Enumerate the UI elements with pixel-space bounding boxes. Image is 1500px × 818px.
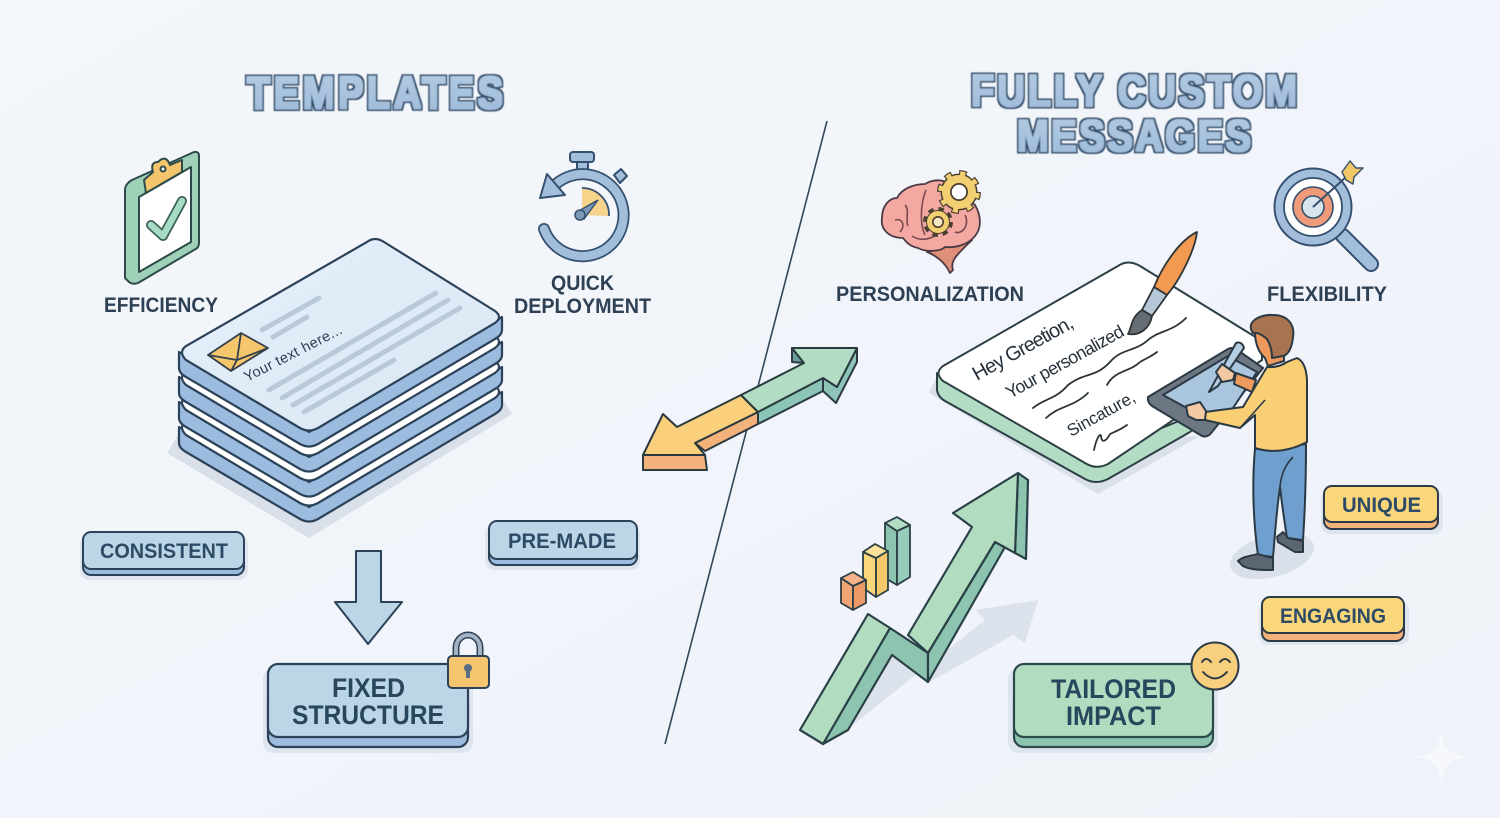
letter handwriting: Hey Greetion,	[969, 312, 1077, 385]
icon: stopwatch	[540, 152, 627, 256]
hair	[1251, 315, 1293, 358]
icon: paintbrush	[1128, 232, 1197, 334]
label: quick deployment: DEPLOYMENT	[514, 295, 651, 318]
pill: unique	[1321, 486, 1443, 534]
card placeholder lines	[262, 293, 460, 412]
icon: smiley	[1192, 642, 1238, 690]
bar: teal	[885, 517, 910, 585]
icon: target magnifier	[1274, 161, 1371, 264]
box: fixed structure	[263, 664, 473, 753]
neck and face	[1255, 332, 1284, 366]
letter handwriting	[969, 312, 1139, 440]
title: templates: TEMPLATES	[247, 67, 503, 118]
letter wavy lines	[1033, 318, 1186, 450]
label: quick deployment: QUICK	[551, 272, 614, 295]
tablet	[1148, 348, 1263, 436]
person legs	[1253, 444, 1306, 557]
card placeholder text: Your text here...	[242, 322, 345, 386]
label: quick deployment	[514, 272, 651, 318]
person shoes	[1238, 532, 1303, 570]
letter handwriting: Your personalized	[1002, 321, 1127, 402]
label: flexibility: FLEXIBILITY	[1267, 283, 1387, 306]
pill: consistent: CONSISTENT	[100, 540, 228, 563]
box: fixed structure: STRUCTURE	[292, 700, 444, 730]
personalized letter	[937, 262, 1262, 482]
letter handwriting: Sincature,	[1064, 388, 1139, 440]
box: tailored impact	[1008, 664, 1218, 753]
bar: yellow	[863, 544, 888, 597]
person torso and sleeve	[1205, 358, 1307, 451]
growth arrow	[800, 473, 1028, 744]
bar chart	[841, 517, 910, 610]
lower hand	[1186, 402, 1206, 420]
watermark sparkle	[1416, 732, 1466, 782]
icon: brain with gears	[882, 174, 980, 273]
stylus	[1209, 343, 1244, 392]
raised hand	[1216, 364, 1235, 382]
arrow: down	[335, 551, 402, 644]
box: fixed structure: FIXED	[332, 673, 405, 703]
growth arrow shadow	[850, 600, 1038, 727]
paper shadow	[929, 370, 1200, 494]
icon: padlock	[448, 635, 489, 688]
box: tailored impact: TAILORED	[1051, 674, 1176, 704]
icon: clipboard	[125, 152, 199, 284]
label: personalization: PERSONALIZATION	[836, 283, 1024, 306]
pill: engaging	[1259, 597, 1409, 645]
pill: pre-made: PRE-MADE	[508, 530, 616, 553]
title: fully custom messages: MESSAGES	[1017, 110, 1251, 161]
template card stack	[179, 239, 502, 522]
gear: small	[926, 210, 950, 234]
title: fully custom messages: FULLY CUSTOM	[971, 65, 1297, 116]
pill: consistent	[80, 532, 248, 580]
arrow: two-way	[643, 348, 857, 470]
card stack shadow	[167, 395, 512, 538]
title: fully custom messages	[971, 65, 1297, 161]
icon: envelope	[208, 333, 268, 371]
label: efficiency: EFFICIENCY	[104, 294, 218, 317]
divider line	[665, 121, 827, 744]
pill: pre-made	[485, 521, 640, 570]
pill: unique: UNIQUE	[1342, 494, 1421, 517]
bar: orange	[841, 572, 866, 610]
raised forearm	[1234, 373, 1256, 392]
gear: large	[941, 174, 977, 210]
person shadow	[1225, 525, 1319, 587]
box: tailored impact: IMPACT	[1066, 701, 1161, 731]
person	[1186, 315, 1307, 570]
pill: engaging: ENGAGING	[1280, 605, 1386, 628]
